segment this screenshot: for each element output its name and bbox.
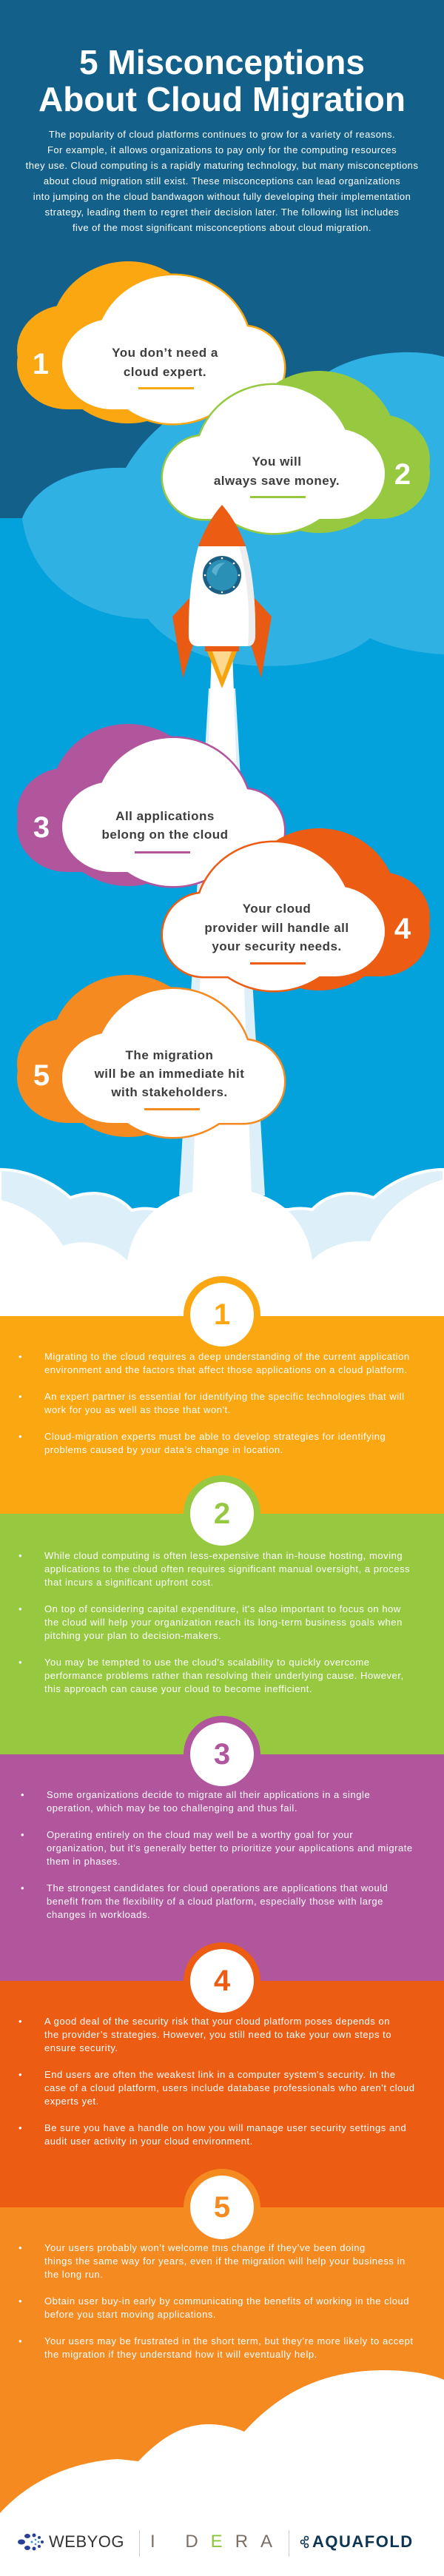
bullet list 3: changes in workloads. bbox=[47, 1909, 150, 1920]
bullet list 4: Be sure you have a handle on how you will manage user security settings and bbox=[44, 2122, 406, 2133]
bullet list 5: Your users may be frustrated in the short term, but they’re more likely to accept bbox=[44, 2335, 414, 2347]
cloud 1: You don’t need a bbox=[112, 346, 218, 360]
cloud 3: 3 bbox=[33, 811, 50, 844]
cloud 2: 2 bbox=[394, 458, 411, 491]
bullet list 1 bbox=[18, 1351, 410, 1455]
intro text: about cloud migration still exist. These misconceptions can lead organizations bbox=[44, 175, 400, 187]
bullet list 2: • bbox=[18, 1550, 22, 1561]
panel: misconception 1 details bbox=[0, 1316, 444, 1514]
bullet list 1: • bbox=[18, 1351, 22, 1362]
icon: webyog dots bbox=[18, 2533, 44, 2551]
bullet list 4: the provider’s strategies. However, you still need to take your own steps to bbox=[44, 2029, 391, 2040]
footer cloud bbox=[0, 2370, 444, 2576]
bullet list 2: • bbox=[18, 1603, 22, 1614]
bullet list 4: ensure security. bbox=[44, 2042, 118, 2053]
panel: misconception 1 details: problems caused by your data’s change in location. bbox=[44, 1444, 283, 1455]
bullet list 2: On top of considering capital expenditure, it's also important to focus on how bbox=[44, 1603, 401, 1614]
bullet list 4: audit user activity in your cloud environment. bbox=[44, 2136, 253, 2147]
bullet list 5: • bbox=[18, 2242, 22, 2253]
bottom clouds bbox=[0, 1170, 444, 1318]
bullet list 1: Migrating to the cloud requires a deep understanding of the current application bbox=[44, 1351, 410, 1362]
cloud 1: cloud expert. bbox=[124, 365, 206, 379]
bullet list 3: organization, but it's generally better to prioritize your applications and migrate bbox=[47, 1842, 413, 1854]
number badge 2 bbox=[184, 1475, 260, 1552]
panel: misconception 2 details bbox=[0, 1514, 444, 1754]
bullet list 4: End users are often the weakest link in a computer system's security. In the bbox=[44, 2069, 396, 2080]
bullet list 4: A good deal of the security risk that your cloud platform poses depends on bbox=[44, 2016, 390, 2027]
bullet list 1: work for you as well as those that won't. bbox=[44, 1404, 231, 1415]
bullet list 5: Your users probably won’t welcome this change if they’ve been doing bbox=[44, 2242, 366, 2253]
number badge 5 bbox=[184, 2169, 260, 2246]
bullet list 3: Operating entirely on the cloud may well be a worthy goal for your bbox=[47, 1829, 353, 1840]
bullet list 4: • bbox=[18, 2069, 22, 2080]
cloud 2: always save money. bbox=[214, 474, 340, 488]
cloud 4: 4 bbox=[394, 913, 411, 945]
cloud 2: You will bbox=[252, 455, 301, 469]
icon: aquafold bubbles bbox=[300, 2536, 309, 2548]
bullet list 2: this approach can cause your cloud to become inefficient. bbox=[44, 1683, 312, 1694]
logo: aquafold: AQUAFOLD bbox=[312, 2532, 414, 2551]
logo: idera: I DERA bbox=[150, 2532, 285, 2552]
logo: webyog: WEBYOG bbox=[49, 2532, 124, 2551]
panel: misconception 5 details bbox=[0, 2207, 444, 2576]
intro text: For example, it allows organizations to pay only for the computing resources bbox=[47, 144, 397, 155]
rocket bbox=[172, 505, 272, 688]
bullet list 1: Cloud-migration experts must be able to develop strategies for identifying bbox=[44, 1431, 386, 1442]
bullet list 3: • bbox=[21, 1882, 24, 1894]
number badge 3 bbox=[184, 1716, 260, 1793]
bullet list 3: benefit from the flexibility of a cloud platform, especially those with large bbox=[47, 1896, 383, 1907]
panel: misconception 4 details bbox=[0, 1981, 444, 2207]
bullet list 2: While cloud computing is often less-expensive than in-house hosting, moving bbox=[44, 1550, 403, 1561]
cloud 3: All applications bbox=[115, 809, 215, 823]
bullet list 5 bbox=[18, 2242, 414, 2360]
bullet list 1: • bbox=[18, 1431, 22, 1442]
bullet list 3: Some organizations decide to migrate all their applications in a single bbox=[47, 1789, 370, 1800]
bullet list 2: pitching your plan to decision-makers. bbox=[44, 1630, 221, 1641]
bullet list 3: • bbox=[21, 1829, 24, 1840]
bullet list 5: • bbox=[18, 2295, 22, 2307]
bullet list 1: environment and the factors that affect those applications on a cloud platform. bbox=[44, 1364, 408, 1375]
intro text: five of the most significant misconceptions about cloud migration. bbox=[73, 222, 371, 233]
bullet list 5: things the same way for years, even if the migration will help your business in bbox=[44, 2255, 406, 2267]
intro text: they use. Cloud computing is a rapidly maturing technology, but many misconceptions bbox=[26, 160, 418, 171]
bullet list 4: case of a cloud platform, users include database professionals who aren't cloud bbox=[44, 2082, 414, 2093]
cloud 2 bbox=[163, 371, 430, 533]
cloud 5 bbox=[17, 975, 284, 1137]
cloud 3 bbox=[17, 724, 284, 886]
bullet list 2: performance problems rather than resolving their underlying cause. However, bbox=[44, 1670, 404, 1681]
hero illustration: About Cloud Migration bbox=[38, 80, 406, 118]
bullet list 2: the cloud will help your organization reach its long-term business goals when bbox=[44, 1617, 403, 1628]
bullet list 3: operation, which may be too challenging and thus fail. bbox=[47, 1802, 297, 1814]
number badge 5: 5 bbox=[214, 2191, 230, 2224]
bullet list 5: • bbox=[18, 2335, 22, 2347]
cloud 1: 1 bbox=[33, 348, 49, 380]
bullet list 5: before you start moving applications. bbox=[44, 2309, 216, 2320]
cloud 3: belong on the cloud bbox=[102, 828, 228, 842]
bullet list 4: • bbox=[18, 2016, 22, 2027]
cloud 4: Your cloud bbox=[243, 902, 311, 916]
bullet list 2: • bbox=[18, 1657, 22, 1668]
number badge 1 bbox=[184, 1276, 260, 1353]
number badge 4: 4 bbox=[214, 1965, 230, 1997]
cloud 4: your security needs. bbox=[212, 939, 342, 953]
bullet list 1: An expert partner is essential for identifying the specific technologies that will bbox=[44, 1391, 405, 1402]
number badge 3: 3 bbox=[214, 1738, 230, 1771]
intro text bbox=[25, 129, 418, 233]
divider bbox=[139, 2530, 140, 2557]
bullet list 3: them in phases. bbox=[47, 1856, 121, 1867]
bullet list 3: • bbox=[21, 1789, 24, 1800]
intro text: strategy, leading them to regret their decision later. The following list includes bbox=[45, 207, 399, 218]
bullet list 2 bbox=[18, 1550, 410, 1694]
cloud 4 bbox=[163, 828, 430, 990]
number badge 2: 2 bbox=[214, 1497, 230, 1530]
bullet list 4: experts yet. bbox=[44, 2096, 99, 2107]
bullet list 4: • bbox=[18, 2122, 22, 2133]
title: 5 Misconceptions bbox=[79, 43, 365, 81]
number badge 1: 1 bbox=[214, 1298, 230, 1331]
cloud 5: 5 bbox=[33, 1059, 50, 1092]
cloud 5: The migration bbox=[126, 1048, 213, 1062]
bullet list 2: that incurs a significant upfront cost. bbox=[44, 1577, 214, 1588]
intro text: The popularity of cloud platforms continues to grow for a variety of reasons. bbox=[49, 129, 395, 140]
bullet list 5: the migration if they understand how it will eventually help. bbox=[44, 2349, 317, 2360]
cloud 5: with stakeholders. bbox=[110, 1085, 228, 1099]
bullet list 3 bbox=[21, 1789, 413, 1920]
cloud 4: provider will handle all bbox=[204, 921, 349, 935]
cloud 1 bbox=[17, 261, 284, 423]
bullet list 3: The strongest candidates for cloud operations are applications that would bbox=[47, 1882, 388, 1894]
bullet list 2: You may be tempted to use the cloud's scalability to quickly overcome bbox=[44, 1657, 370, 1668]
bullet list 5: Obtain user buy-in early by communicating the benefits of working in the cloud bbox=[44, 2295, 409, 2307]
bullet list 2: applications to the cloud often requires significant manual oversight, a process bbox=[44, 1563, 410, 1574]
bullet list 4 bbox=[18, 2016, 414, 2147]
cloud 5: will be an immediate hit bbox=[94, 1067, 244, 1081]
panel: misconception 3 details bbox=[0, 1754, 444, 1981]
bullet list 5: the long run. bbox=[44, 2269, 103, 2280]
hero illustration bbox=[0, 0, 444, 1261]
intro text: into jumping on the cloud bandwagon without fully developing their implementation bbox=[33, 191, 411, 202]
number badge 4 bbox=[184, 1942, 260, 2019]
bullet list 1: • bbox=[18, 1391, 22, 1402]
rocket trail bbox=[179, 651, 265, 1195]
